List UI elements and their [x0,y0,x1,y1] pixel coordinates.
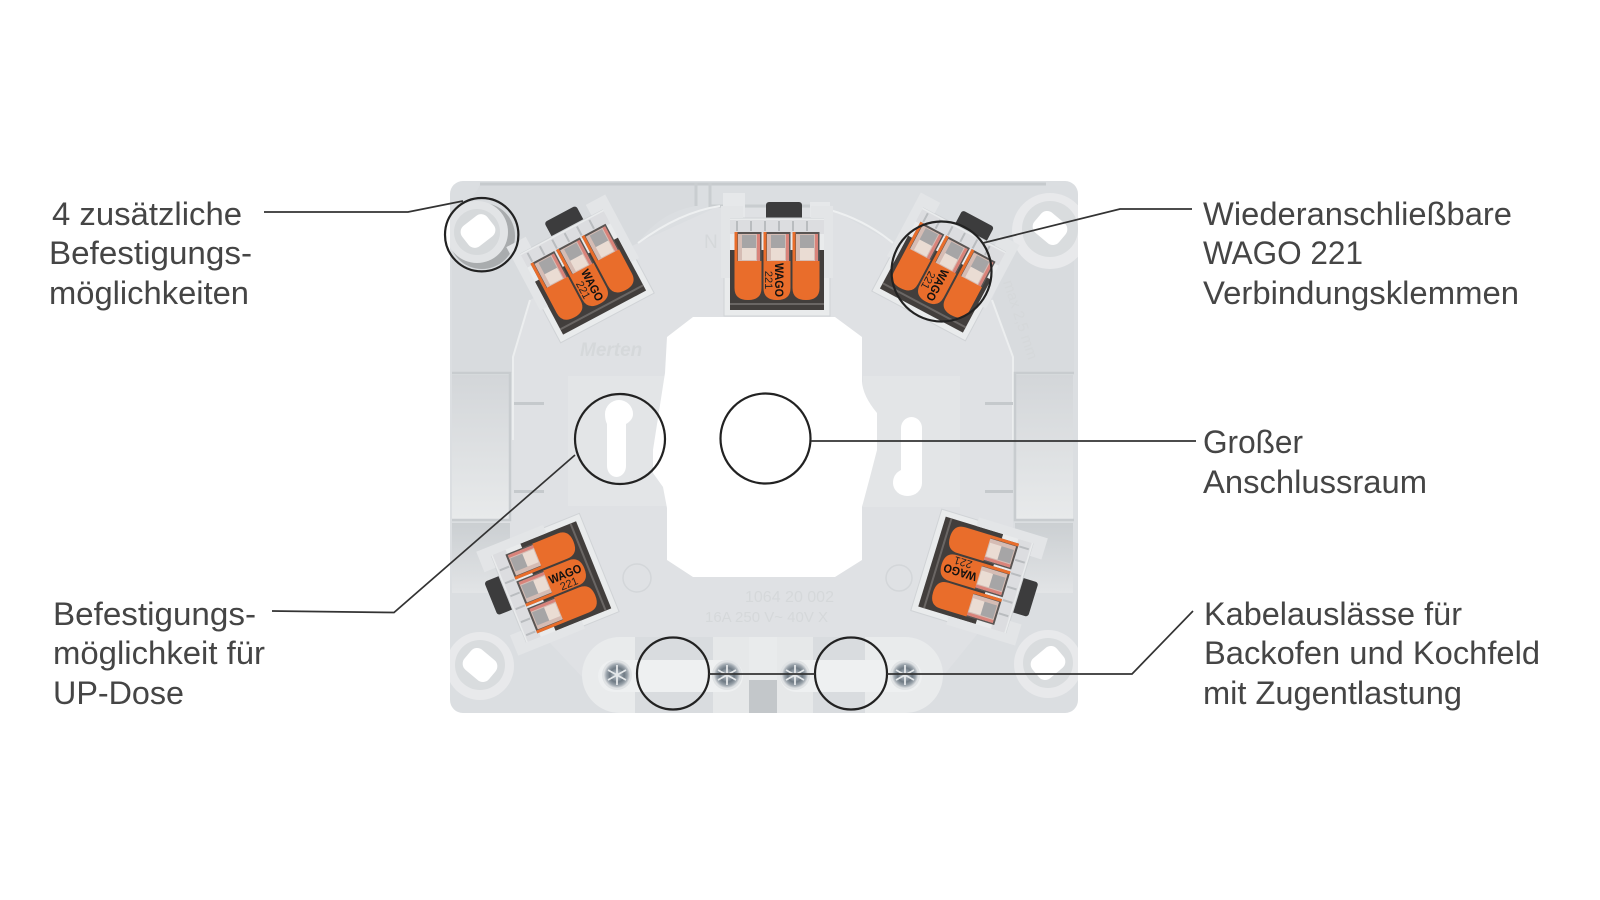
embossed markings: 1064 20 002 [745,589,834,606]
marker circle [892,222,992,322]
marker circle [720,394,810,484]
label text: WAGO 221 [1203,235,1363,271]
WAGO clamp top right [869,189,1022,342]
label text: Wiederanschließbare [1203,196,1512,232]
label text [1203,424,1427,500]
WAGO clamp top left: WAGO [578,267,606,303]
leader line to label [887,611,1193,674]
screw post bottom left [446,632,514,700]
label text [1203,196,1519,311]
leader line [264,201,463,212]
label text: UP-Dose [53,675,184,711]
label text: möglichkeiten [49,275,249,311]
leader line [983,209,1192,243]
screw post bottom right [1014,630,1082,698]
side pockets [452,375,510,520]
embossed markings: 16A 250 V~ 40V X [705,609,828,626]
keyhole slot left [605,400,633,477]
leader line [811,440,1196,442]
marker circle [575,394,665,484]
key slot panels [568,376,668,506]
label text: Kabelauslässe für [1204,596,1462,632]
WAGO clamp top left: 221 [573,279,592,301]
label text: möglichkeit für [53,635,265,671]
embossed markings: Merten [580,340,642,361]
plate body [450,181,1078,713]
top rim and ribs [480,182,1046,186]
label text [53,596,265,711]
WAGO clamp bottom left [473,511,620,657]
embossed markings [580,232,1041,626]
WAGO clamp top right: WAGO [923,267,951,303]
WAGO clamp top centre [721,193,833,316]
panel: mounting plate [446,181,1088,713]
WAGO clamp bottom right: 221 [953,553,974,570]
callout: reconnectable WAGO clamps [892,196,1519,322]
label text: Anschlussraum [1203,464,1427,500]
callout: flush-mounted box fastening [53,394,665,711]
label text: Befestigungs- [49,235,252,271]
leader line [272,455,575,612]
screw post top left [446,201,515,269]
label text: mit Zugentlastung [1203,675,1462,711]
screws [602,660,920,690]
WAGO clamp bottom right: WAGO [942,561,978,584]
callout: additional fastening points [49,196,518,311]
label text: Verbindungsklemmen [1203,275,1519,311]
central floor [500,208,1013,680]
label text [49,196,252,311]
marker circle [445,198,518,271]
embossed markings: max 2,5 mm [999,278,1041,362]
WAGO clamp bottom left: WAGO [547,561,583,587]
keyhole slot right [893,417,922,496]
label text: Befestigungs- [53,596,256,632]
embossed markings: N [704,232,718,253]
callout: cable outlets [637,596,1540,711]
large connection space [653,317,877,577]
callout: large connection space [720,394,1427,500]
WAGO clamp top centre: WAGO [772,263,786,297]
WAGO clamp top right: 221 [918,269,937,291]
screw post top right [1012,193,1078,269]
WAGO clamp bottom left: 221 [558,575,580,593]
WAGO clamp bottom right [910,506,1052,647]
WAGO clamp top left [504,191,657,344]
leader line [709,673,815,675]
label text [1203,596,1540,711]
label text: Backofen und Kochfeld [1204,635,1540,671]
WAGO clamp top centre: 221 [762,271,774,289]
label text: 4 zusätzliche [52,196,242,232]
cable outlets with strain relief [582,637,943,713]
label text: Großer [1203,424,1303,460]
marker circle left [637,638,709,710]
top channel [452,185,696,373]
marker circle right [815,638,887,710]
